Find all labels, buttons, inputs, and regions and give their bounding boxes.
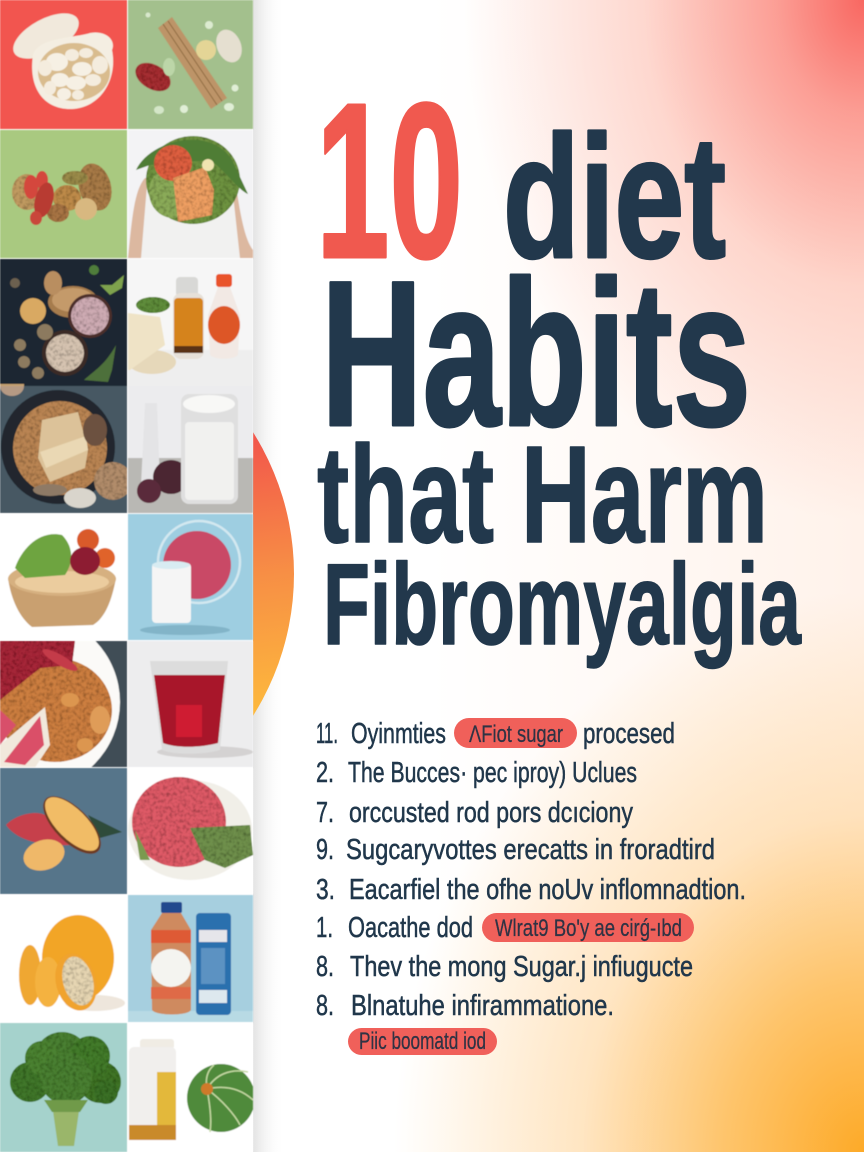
highlight pill 1: ΛFiot sugar — [469, 721, 563, 748]
tile: bowls on dark slate — [0, 259, 127, 386]
tile: fruit slices on slate blue — [0, 768, 127, 894]
tile: person with food plate — [128, 130, 253, 258]
tile: milk glass and red ball on blue — [128, 514, 253, 640]
tile: red snacks on white plate — [0, 640, 128, 768]
list item 3: orccusted rod pors dcıciony — [349, 797, 633, 829]
list item 8: Blnatuhe infirammatione. — [351, 990, 614, 1022]
tile: cheese and two bottles — [128, 259, 253, 386]
tile: oil jug and melon — [128, 1023, 255, 1152]
tile: straws and bean on sage — [128, 0, 253, 129]
tile: white nut shell on red — [0, 0, 127, 129]
list item 1: 11. — [316, 718, 338, 750]
tile: broccoli on teal — [0, 1023, 127, 1152]
tile: two supplement bottles — [128, 895, 253, 1022]
tile: basket of nuts — [0, 514, 127, 640]
panel: food photo grid — [0, 0, 255, 1152]
list item 4: Sugcaryvottes erecatts in froradtird — [346, 834, 715, 866]
tile: snack cluster on green — [0, 130, 127, 258]
title: diet: diet — [503, 99, 726, 294]
list item 1 — [316, 718, 675, 750]
tile: milk glass and dark fruit — [128, 386, 253, 513]
list item 8: 8. — [316, 990, 334, 1022]
title: 10: 10 — [316, 57, 463, 304]
list item 4: 9. — [316, 834, 334, 866]
list item 1: Oyinmties — [351, 718, 446, 750]
highlight pill 3: Piic boomatd iod — [359, 1028, 486, 1055]
tile: orange and cut pieces — [0, 895, 127, 1022]
list item 2: The Bucces· pec iproy) Uclues — [348, 757, 637, 789]
list item 2: 2. — [316, 757, 334, 789]
list item 2 — [316, 757, 637, 789]
orange semicircle accent — [253, 432, 294, 716]
tile: minced meat plate — [128, 768, 253, 894]
list item 6 — [316, 912, 694, 944]
list item 6: 1. — [316, 912, 333, 944]
list item 7: Thev the mong Sugar.j infiugucte — [350, 951, 693, 983]
list item 1: procesed — [583, 718, 675, 750]
list item 7: 8. — [316, 951, 334, 983]
column shadow — [253, 0, 285, 1152]
tile: glass of red juice — [128, 641, 253, 767]
list item 5: 3. — [316, 874, 335, 906]
highlight pill 2: Wlrat9 Bo'y ae cirǵ-ıbd — [495, 915, 682, 942]
list item 6: Oacathe dod — [348, 912, 473, 944]
list item 5: Eacarfiel the ofhe noUv inflomnadtion. — [349, 874, 746, 906]
tile: grain plate on slate — [0, 376, 132, 513]
list item 3: 7. — [316, 797, 334, 829]
